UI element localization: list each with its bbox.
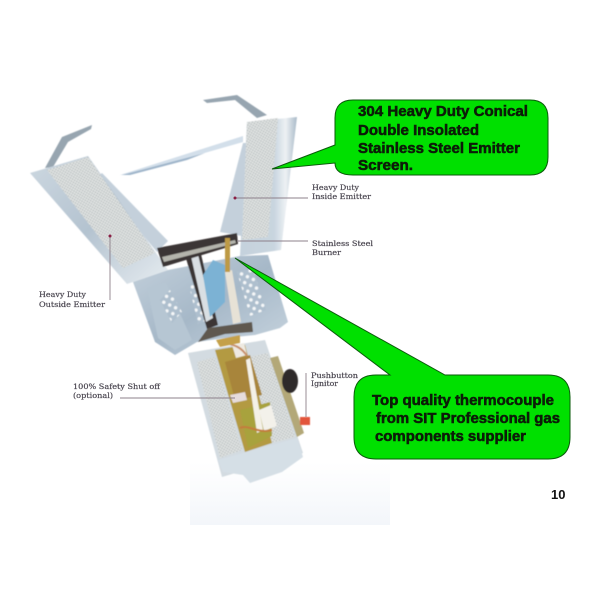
page number: 10: [551, 487, 565, 502]
label: pushbutton ignitor: Ignitor: [311, 379, 338, 388]
callout text: thermocouple: components supplier: [375, 428, 526, 445]
valve tube: [188, 340, 303, 477]
callout: emitter screen: [272, 100, 548, 175]
red pushbutton: [300, 417, 310, 425]
label: outside emitter: Outside Emitter: [39, 300, 105, 309]
burner photograph illustration: [30, 95, 310, 483]
callout text: emitter screen: Screen.: [358, 157, 413, 174]
label: burner: Burner: [312, 248, 341, 257]
callout text: thermocouple: from SIT Professional gas: [376, 410, 560, 427]
label: inside emitter: Heavy Duty: [312, 183, 360, 192]
thermocouple rod: [225, 238, 230, 272]
label: inside emitter: Inside Emitter: [312, 192, 371, 201]
callout text: emitter screen: Stainless Steel Emitter: [358, 140, 520, 157]
label: pushbutton ignitor: Pushbutton: [311, 371, 358, 380]
label: burner: Stainless Steel: [312, 239, 374, 248]
stainless steel burner: [157, 233, 238, 267]
label: safety shut off: 100% Safety Shut off: [73, 382, 161, 391]
ignitor knob: [282, 369, 298, 393]
ignitor panel: [270, 356, 304, 437]
label: safety shut off: (optional): [73, 391, 113, 400]
callout shape: emitter screen: [272, 100, 548, 175]
callout text: emitter screen: 304 Heavy Duty Conical: [358, 103, 528, 120]
leader lines: [110, 198, 308, 417]
bottom cap: [218, 438, 303, 483]
leader dots: [108, 196, 236, 238]
callout text: emitter screen: Double Insolated: [358, 122, 479, 139]
callout shape: thermocouple: [235, 258, 570, 459]
callout: thermocouple: [235, 258, 570, 459]
callout text: thermocouple: Top quality thermocouple: [372, 392, 554, 409]
lower basket: [133, 250, 288, 355]
right emitter: [240, 117, 297, 256]
background floor shading: [190, 462, 390, 525]
label: outside emitter: Heavy Duty: [39, 290, 87, 299]
inner emitter plates: [96, 143, 250, 252]
back bar: [120, 136, 243, 175]
mounting brackets: [45, 95, 267, 168]
left emitter: [30, 156, 168, 284]
